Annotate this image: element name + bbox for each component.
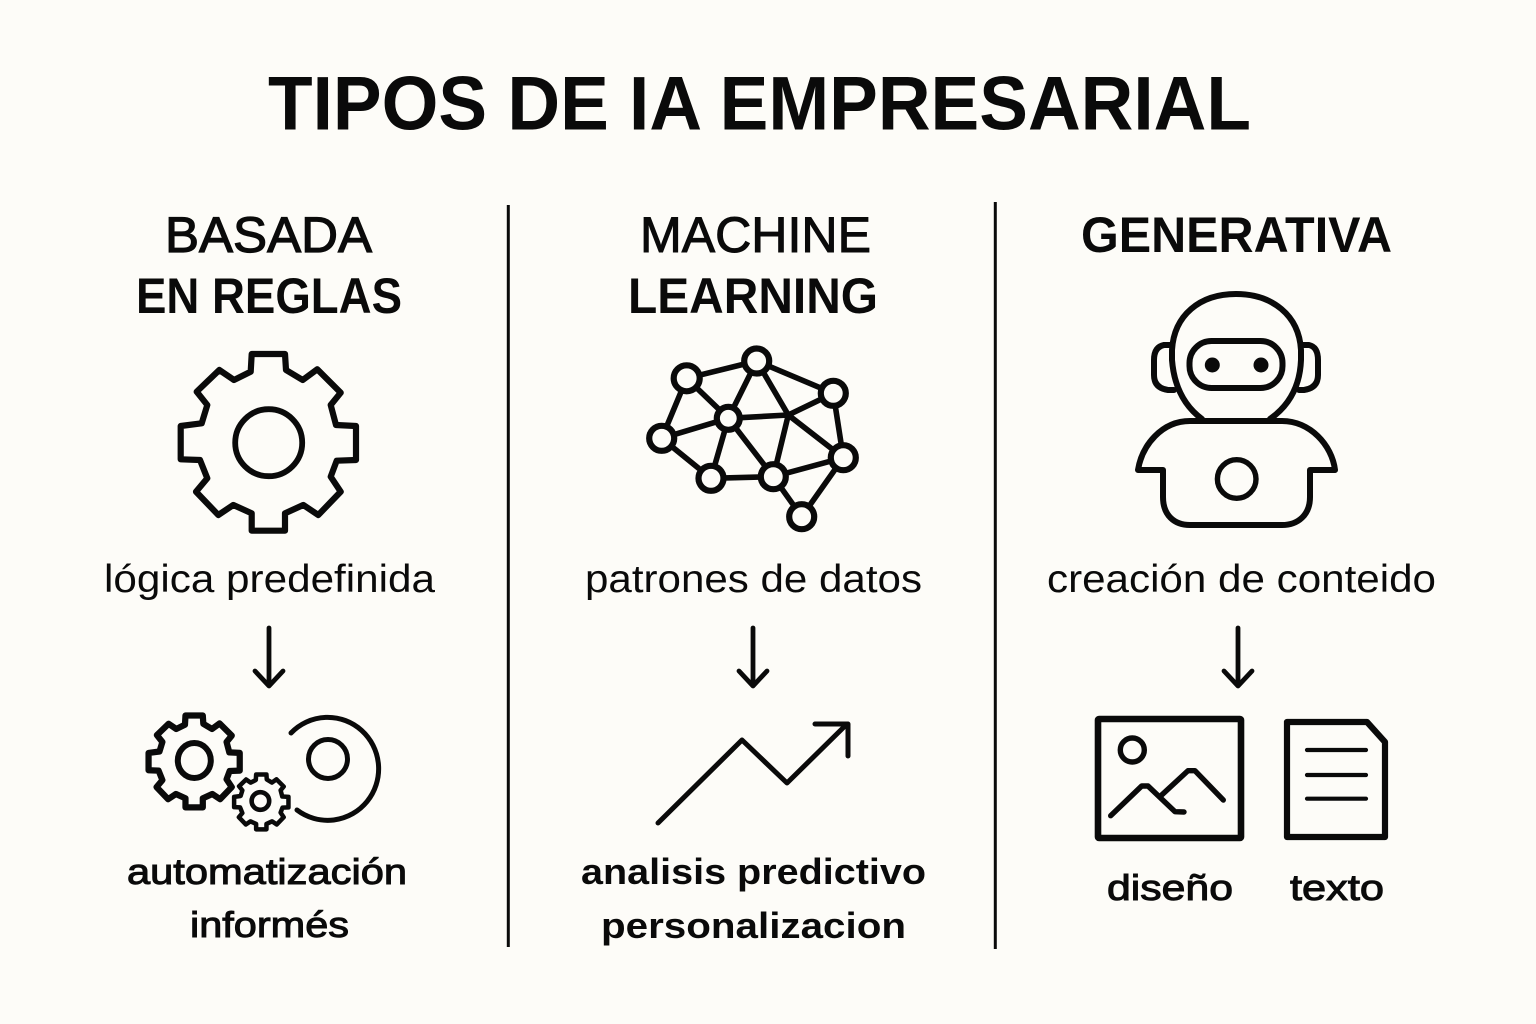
- panel: machine learning: [581, 207, 926, 946]
- text: analisis predictivo personalizacion: analisis predictivo: [581, 851, 926, 892]
- text: patrones de datos: patrones de datos: [585, 558, 922, 601]
- icon: rising trend arrow: [658, 724, 848, 823]
- text: automatización informés: automatización: [127, 851, 407, 892]
- icon: gears and crescent: [149, 715, 379, 829]
- heading: machine learning: MACHINE: [640, 207, 871, 263]
- heading: basada en reglas: EN REGLAS: [136, 268, 402, 324]
- text: lógica predefinida: lógica predefinida: [104, 558, 435, 601]
- text: creación de conteido: creación de conteido: [1047, 558, 1436, 601]
- icon: document: [1287, 722, 1385, 837]
- text: automatización informés: informés: [190, 904, 349, 945]
- label: diseño: diseño: [1107, 867, 1233, 908]
- icon: gear: [181, 354, 356, 531]
- arrow: down: [255, 628, 283, 686]
- icon: robot: [1138, 294, 1335, 525]
- heading: machine learning: [628, 207, 878, 324]
- heading: machine learning: LEARNING: [628, 268, 878, 324]
- heading: basada en reglas: BASADA: [165, 207, 373, 263]
- icon: neural network brain: [649, 348, 856, 529]
- panel: generativa: [1047, 207, 1436, 908]
- heading: generativa: GENERATIVA: [1081, 207, 1392, 263]
- text: automatización informés: [127, 851, 407, 945]
- title: TIPOS DE IA EMPRESARIAL: [268, 62, 1251, 146]
- heading: basada en reglas: [136, 207, 402, 324]
- panel: basada en reglas: [104, 207, 435, 945]
- label: texto: texto: [1290, 867, 1384, 908]
- text: analisis predictivo personalizacion: personalizacion: [601, 905, 906, 946]
- text: analisis predictivo personalizacion: [581, 851, 926, 946]
- icon: image: [1098, 719, 1241, 838]
- arrow: down: [739, 628, 767, 686]
- arrow: down: [1224, 628, 1252, 686]
